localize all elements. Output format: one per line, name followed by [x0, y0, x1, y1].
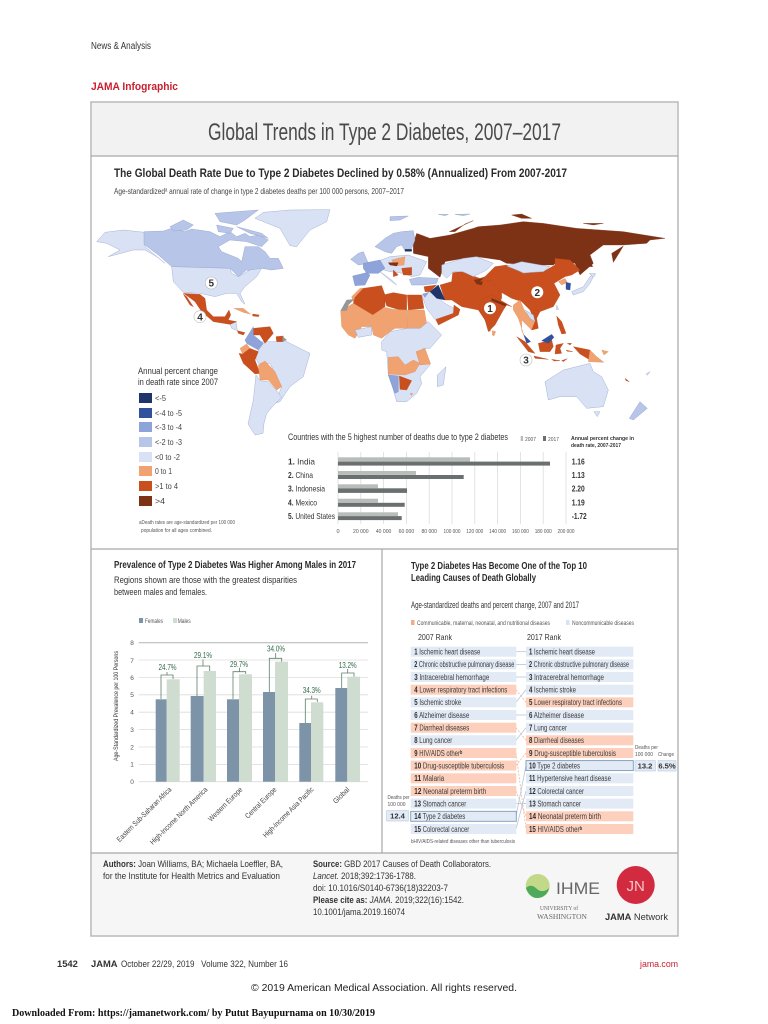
map legend: >1 to 4	[155, 481, 178, 491]
chart legend: 2017	[548, 437, 559, 443]
heading: leading causes	[411, 560, 587, 584]
category labels: Eastern Sub-Saharan Africa	[115, 785, 174, 844]
logo: IHME University of Washington: UNIVERSITY of	[540, 905, 578, 912]
category labels: High-Income Asia Pacific	[261, 785, 316, 839]
2007 rank list: 11 Malaria	[414, 774, 445, 783]
map legend: in death rate since 2007	[138, 376, 218, 387]
subheading: map: a	[165, 188, 168, 194]
callout: 2017 deaths and change: 6.5%	[658, 762, 676, 771]
callout: 2017 deaths and change: Change	[658, 752, 674, 758]
category labels	[115, 785, 352, 847]
bar chart: top 5 countries by deaths: 40 000	[376, 529, 391, 535]
2017 rank list: 14 Neonatal preterm birth	[529, 812, 601, 821]
prevalence description: between males and females.	[114, 587, 207, 598]
source and citation: doi: 10.1016/S0140-6736(18)32203-7	[313, 882, 448, 893]
infographic frame	[91, 102, 678, 936]
bar chart: top 5 countries by deaths: 200 000	[558, 529, 574, 535]
subheading: map: Age-standardized	[114, 186, 181, 196]
2017 rank list: 2 Chronic obstructive pulmonary disease	[529, 660, 629, 669]
bar chart: top 5 countries by deaths: 1.13	[572, 471, 585, 480]
bar chart: prevalence by sex: 0	[130, 779, 134, 786]
bar chart: prevalence by sex: 4	[130, 710, 134, 716]
2017 rank list: 10 Type 2 diabetes	[529, 761, 580, 770]
map: Europe, Africa, Middle East	[341, 231, 502, 402]
map: Russia, Australia and Arctic islands	[390, 214, 665, 420]
bar chart: top 5 countries by deaths: 160 000	[512, 529, 529, 535]
map: Alaska, Central and South America	[97, 230, 310, 435]
leading causes legend	[411, 620, 634, 627]
bar chart: prevalence by sex: 3	[130, 727, 134, 734]
2017 rank list: 11 Hypertensive heart disease	[529, 774, 611, 783]
heading: global death rate: The Global Death Rate Due to Type 2 Diabetes Declined by 0.58% (Annualized) From 2007-2017	[114, 168, 567, 180]
logo: JAMA Network: JAMA Network	[605, 912, 669, 922]
category labels: Central Europe	[243, 785, 278, 820]
2007 rank list: 10 Drug-susceptible tuberculosis	[414, 761, 504, 770]
2017 rank list: b	[580, 826, 582, 832]
bar chart: top 5 countries by deaths: 100 000	[444, 529, 460, 535]
callout: 2017 deaths and change: 100 000	[635, 752, 653, 758]
page footer: jama.com	[639, 958, 678, 969]
2007 rank list: 4 Lower respiratory tract infections	[414, 686, 507, 694]
map: North America and Greenland	[144, 210, 330, 324]
authors: Authors: Joan Williams, BA; Michaela Loeffler, BA,	[103, 858, 283, 869]
map markers: numbered countries: 5	[209, 279, 215, 290]
2007 rank list: 3 Intracerebral hemorrhage	[414, 673, 489, 682]
prevalence description	[114, 575, 297, 598]
bar chart: top 5 countries by deaths: 80 000	[421, 529, 437, 535]
2017 rank list: 5 Lower respiratory tract infections	[529, 698, 622, 707]
map markers: numbered countries: 2	[535, 288, 541, 299]
2007 rank list: 9 HIV/AIDS other	[414, 749, 473, 758]
map markers: numbered countries: 3	[523, 356, 529, 367]
2017 rank list: 7 Lung cancer	[529, 724, 567, 732]
leading causes legend: Noncommunicable diseases	[572, 621, 634, 627]
difference labels: 34.0%	[267, 644, 285, 654]
bar chart: top 5 countries by deaths: 2.20	[572, 484, 585, 494]
prevalence legend	[139, 618, 191, 625]
bar chart: top 5 countries by deaths: -1.72	[572, 512, 587, 521]
map footnote: population for all ages combined.	[141, 528, 212, 534]
copyright line: © 2019 American Medical Association. All rights reserved.	[251, 983, 517, 994]
authors: for the Institute for Health Metrics and Evaluation	[103, 870, 280, 881]
difference labels: 24.7%	[158, 662, 177, 672]
2007 rank list: b	[460, 750, 462, 756]
running header: News & Analysis	[91, 41, 151, 52]
y axis title: Age-Standardized Prevalence per 100 Persons	[113, 650, 120, 761]
prevalence legend: Males	[178, 619, 191, 625]
2017 rank list: 1 Ischemic heart disease	[529, 648, 595, 656]
map markers: numbered countries	[194, 277, 543, 367]
2017 rank list: 6 Alzheimer disease	[529, 711, 584, 720]
map legend: >4	[155, 496, 165, 506]
heading: leading causes: Leading Causes of Death Globally	[411, 572, 536, 584]
bar chart: top 5 countries by deaths: 0	[336, 529, 340, 535]
category labels: Western Europe	[206, 785, 244, 823]
callout: 2007 deaths per 100 000: 12.4	[390, 812, 406, 821]
map legend: <-4 to -5	[155, 408, 182, 418]
section label: JAMA Infographic: JAMA Infographic	[91, 81, 178, 93]
logo: IHME University of Washington	[526, 874, 600, 921]
category labels: High-Income North America	[148, 785, 210, 847]
bar chart: top 5 countries by deaths: 20 000	[353, 529, 369, 535]
callout: 2007 deaths per 100 000	[387, 795, 410, 821]
bar chart: prevalence by sex: 5	[130, 692, 134, 699]
bar chart: top 5 countries by deaths: 5. United States	[288, 511, 335, 521]
callout: 2017 deaths and change	[635, 745, 676, 771]
2007 rank list: 6 Alzheimer disease	[414, 711, 469, 720]
2007 rank list: 5 Ischemic stroke	[414, 698, 461, 707]
change column heading: Annual percent change in	[571, 436, 634, 442]
2017 rank list	[526, 647, 633, 834]
rank connectors	[516, 652, 526, 829]
column headings	[418, 632, 562, 642]
bar chart: top 5 countries by deaths: 180 000	[535, 529, 552, 535]
difference brackets	[161, 653, 354, 723]
column headings: 2007 Rank	[418, 632, 453, 642]
map: East and Southeast Asia	[480, 258, 608, 362]
bar chart: top 5 countries by deaths: 4. Mexico	[288, 498, 317, 508]
page footer: 1542	[57, 958, 78, 969]
2007 rank list: 7 Diarrheal diseases	[414, 724, 469, 732]
map footnote	[139, 520, 235, 534]
2007 rank list	[411, 647, 516, 834]
prevalence legend: Females	[145, 619, 163, 625]
leading causes subheading: Age-standardized deaths and percent change, 2007 and 2017	[411, 600, 579, 610]
map markers: numbered countries: 4	[197, 312, 203, 323]
source and citation: 10.1001/jama.2019.16074	[313, 906, 405, 917]
bar chart: prevalence by sex	[113, 640, 368, 847]
bar chart: prevalence by sex: 2	[130, 744, 134, 752]
bar chart: prevalence by sex: 8	[130, 640, 134, 647]
bar chart: top 5 countries by deaths: 3. Indonesia	[288, 484, 325, 494]
bar chart: top 5 countries by deaths: 1. India	[288, 456, 315, 466]
2007 rank list: 12 Neonatal preterm birth	[414, 787, 486, 796]
download stamp: Downloaded From: https://jamanetwork.com/ by Putut Bayupurnama on 10/30/2019	[12, 1008, 375, 1019]
bar chart: prevalence by sex: 7	[130, 658, 134, 665]
heading: leading causes: Type 2 Diabetes Has Become One of the Top 10	[411, 560, 587, 572]
callout: 2007 deaths per 100 000: 100 000	[388, 802, 406, 808]
logo: IHME University of Washington: IHME	[556, 879, 600, 898]
difference labels: 29.7%	[230, 659, 248, 669]
column headings: 2017 Rank	[527, 632, 562, 642]
bar chart: top 5 countries by deaths: 1.16	[572, 458, 585, 466]
2017 rank list: 15 HIV/AIDS other	[529, 825, 591, 834]
bar chart: top 5 countries by deaths: 140 000	[489, 529, 506, 535]
2007 rank list: 8 Lung cancer	[414, 736, 453, 745]
bar chart: prevalence by sex: 1	[130, 762, 134, 768]
heading: prevalence: Prevalence of Type 2 Diabetes Was Higher Among Males in 2017	[114, 559, 356, 571]
chart legend: 2007	[525, 437, 536, 443]
bars	[156, 662, 360, 782]
logo: JAMA Network	[605, 866, 669, 922]
2017 rank list: 8 Diarrheal diseases	[529, 736, 584, 745]
2017 rank list: 9 Drug-susceptible tuberculosis	[529, 749, 616, 758]
leading causes legend: Communicable, maternal, neonatal, and nutritional diseases	[417, 621, 550, 627]
leading causes footnote: bHIV/AIDS-related diseases other than tuberculosis	[411, 839, 515, 845]
world map	[97, 210, 665, 435]
difference labels: 29.1%	[194, 650, 212, 660]
chart title: Countries with the 5 highest number of deaths due to type 2 diabetes	[288, 432, 508, 442]
bar chart: top 5 countries by deaths: 2. China	[288, 470, 313, 480]
map legend: <0 to -2	[155, 452, 180, 462]
difference labels: 34.3%	[303, 685, 321, 695]
change column heading	[571, 436, 634, 449]
2017 rank list: 13 Stomach cancer	[529, 799, 581, 808]
source and citation: Please cite as: JAMA. 2019;322(16):1542.	[313, 894, 464, 905]
authors	[103, 858, 283, 881]
2007 rank list: 13 Stomach cancer	[414, 799, 467, 808]
source and citation	[313, 858, 491, 917]
change column heading: death rate, 2007-2017	[571, 443, 621, 449]
category labels: Global	[331, 785, 352, 806]
subheading: map: annual rate of change in type 2 diabetes deaths per 100 000 persons, 2007–2017	[167, 186, 404, 196]
2017 rank list: 12 Colorectal cancer	[529, 787, 584, 796]
bar chart: top 5 countries by deaths: 60 000	[399, 529, 414, 535]
title: Global Trends in Type 2 Diabetes, 2007–2017	[208, 119, 561, 146]
callout: 2017 deaths and change: 13.2	[638, 762, 652, 771]
page footer: JAMA	[91, 958, 118, 969]
2007 rank list: 15 Colorectal cancer	[414, 825, 470, 834]
map footnote: aDeath rates are age-standardized per 100 000	[139, 520, 235, 526]
map legend	[138, 365, 218, 506]
bar chart: top 5 countries by deaths: 120 000	[466, 529, 483, 535]
map legend: Annual percent change	[138, 365, 218, 376]
page footer	[57, 958, 678, 969]
callout: 2017 deaths and change: Deaths per	[635, 745, 658, 751]
map legend: 0 to 1	[155, 466, 172, 476]
2007 rank list: 2 Chronic obstructive pulmonary disease	[414, 660, 514, 669]
chart legend	[521, 436, 559, 443]
prevalence description: Regions shown are those with the greatest disparities	[114, 575, 297, 586]
page footer: October 22/29, 2019 Volume 322, Number 16	[121, 958, 288, 969]
source and citation: Source: GBD 2017 Causes of Death Collaborators.	[313, 858, 491, 869]
bar chart: top 5 countries by deaths: 1.19	[572, 498, 585, 508]
2007 rank list: 1 Ischemic heart disease	[414, 648, 480, 656]
difference labels	[158, 644, 357, 695]
map legend: <-2 to -3	[155, 437, 182, 447]
2017 rank list: 3 Intracerebral hemorrhage	[529, 673, 604, 682]
2007 rank list: 14 Type 2 diabetes	[414, 812, 465, 821]
bar chart: prevalence by sex: 6	[130, 675, 134, 682]
logo: IHME University of Washington: WASHINGTON	[537, 913, 587, 921]
2017 rank list: 4 Ischemic stroke	[529, 686, 576, 694]
logo: JAMA Network: JN	[627, 878, 645, 895]
map legend: <-5	[155, 393, 166, 403]
callout: 2007 deaths per 100 000: Deaths per	[388, 795, 410, 801]
difference labels: 13.2%	[339, 660, 357, 670]
source and citation: Lancet. 2018;392:1736-1788.	[313, 870, 416, 881]
bar chart: top 5 countries by deaths	[288, 432, 634, 535]
map markers: numbered countries: 1	[487, 304, 493, 315]
map legend: <-3 to -4	[155, 422, 182, 432]
